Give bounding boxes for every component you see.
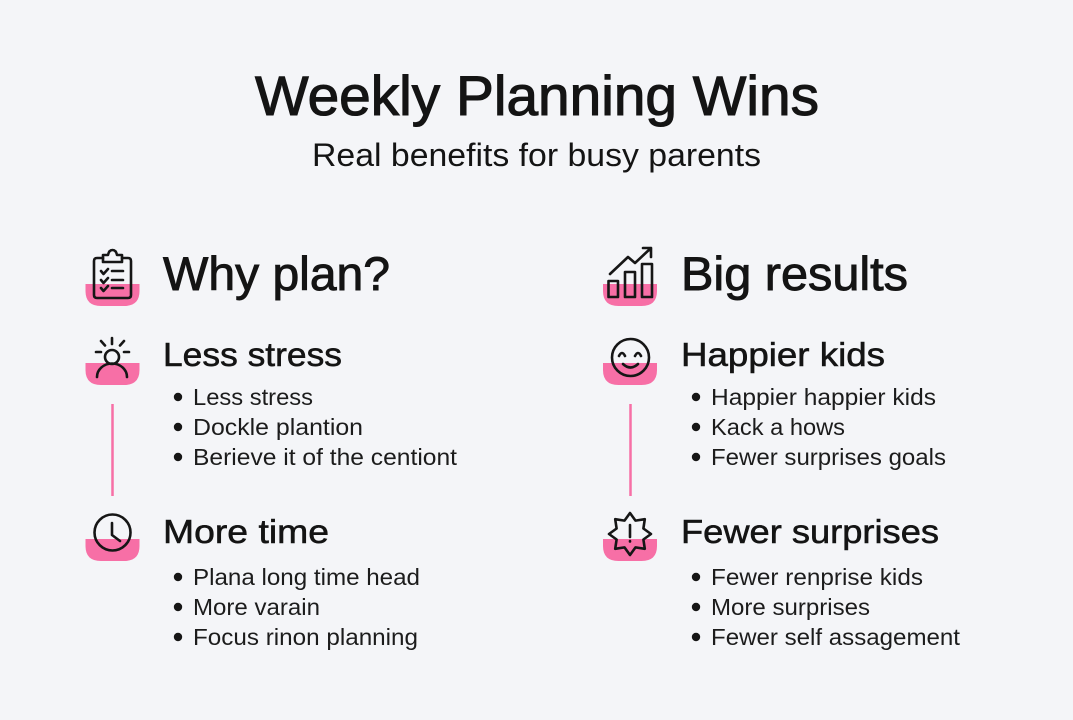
heading: why plan: Why plan?: [163, 247, 390, 300]
list: less stress: Less stress: [193, 384, 313, 410]
icon: rising bar chart: [603, 248, 657, 306]
subtitle: Real benefits for busy parents: [312, 137, 761, 173]
heading: happier kids: Happier kids: [681, 337, 885, 374]
heading: less stress: Less stress: [163, 337, 342, 374]
icon: person with sun rays: [86, 338, 140, 385]
list: fewer surprises: Fewer renprise kids: [711, 564, 923, 590]
list: fewer surprises: Fewer self assagement: [711, 624, 960, 650]
list: more time: Focus rinon planning: [193, 624, 418, 650]
icon: smiley face: [603, 339, 657, 385]
icon: warning starburst: [603, 513, 657, 561]
heading: big results: Big results: [681, 247, 908, 300]
list: more time: [174, 564, 420, 650]
list: happier kids: [692, 384, 946, 470]
list: less stress: [174, 384, 457, 470]
list: less stress: Dockle plantion: [193, 414, 363, 440]
connector line: [111, 404, 114, 496]
icon: clipboard checklist: [86, 250, 140, 306]
list: happier kids: Kack a hows: [711, 414, 845, 440]
title: Weekly Planning Wins: [255, 64, 819, 127]
list: more time: More varain: [193, 594, 320, 620]
list: happier kids: Fewer surprises goals: [711, 444, 946, 470]
heading: fewer surprises: Fewer surprises: [681, 514, 939, 551]
connector line: [629, 404, 632, 496]
list: fewer surprises: More surprises: [711, 594, 870, 620]
list: more time: Plana long time head: [193, 564, 420, 590]
list: fewer surprises: [692, 564, 960, 650]
list: less stress: Berieve it of the centiont: [193, 444, 457, 470]
list: happier kids: Happier happier kids: [711, 384, 936, 410]
panel: why plan: [86, 247, 457, 650]
heading: more time: More time: [163, 514, 329, 551]
icon: clock: [86, 514, 140, 561]
panel: big results: [603, 247, 960, 650]
